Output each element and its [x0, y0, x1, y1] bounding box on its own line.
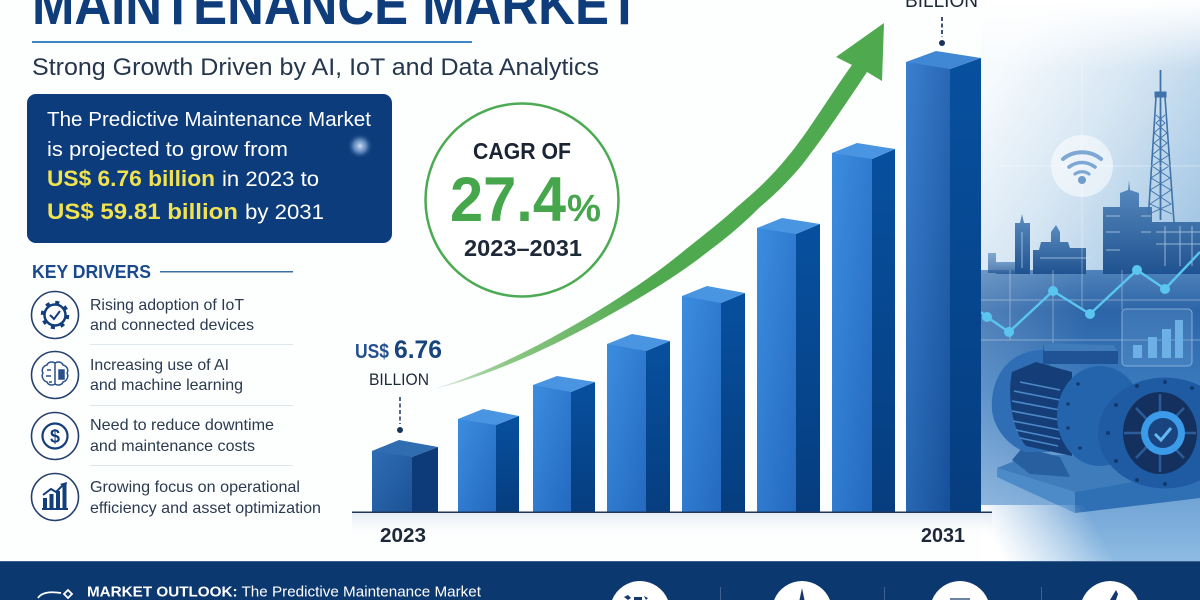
bar 2027: [682, 286, 745, 512]
icon: brain: [42, 362, 68, 385]
axis label 2031: 2031: [921, 525, 965, 547]
driver: AI: and machine learning: [90, 377, 243, 394]
icon: gear: [42, 302, 68, 328]
subtitle: Strong Growth Driven by AI, IoT and Data Analytics: [32, 54, 599, 81]
bar 2029: [832, 143, 895, 512]
driver: downtime: Need to reduce downtime: [90, 417, 274, 434]
bar chart: [352, 51, 992, 513]
footer icon 3: [932, 581, 988, 600]
driver: efficiency: Growing focus on operational: [90, 479, 300, 496]
growth arrow: [430, 23, 884, 390]
title rule: [32, 41, 472, 43]
bar 2028: [757, 218, 820, 512]
driver: efficiency: [32, 474, 321, 520]
tower lattice: [1148, 70, 1174, 222]
label: start value: BILLION: [369, 370, 429, 389]
driver: IoT: and connected devices: [90, 317, 254, 334]
axis label 2023: 2023: [380, 525, 426, 547]
CAGR callout: 2023–2031: [464, 235, 582, 261]
icon: dollar: [42, 424, 68, 448]
guide lines: [981, 60, 1200, 360]
electric motor: [992, 343, 1200, 513]
icon: dollar: $: [50, 426, 60, 446]
label: start value: 6.76: [394, 336, 442, 364]
label: start value: [355, 336, 442, 433]
bar 2024: [458, 409, 519, 512]
panel: market summary: is projected to grow from: [47, 138, 288, 161]
icon: growth chart: [42, 482, 68, 510]
label: end value: [905, 0, 978, 46]
panel: market summary: The Predictive Maintenance Market: [47, 108, 371, 131]
panel: market summary: by 2031: [245, 201, 324, 224]
driver: AI: Increasing use of AI: [90, 357, 229, 374]
label: start value: US$: [355, 341, 389, 363]
photo: industrial plant and motor: [981, 0, 1200, 561]
heading: key drivers: KEY DRIVERS: [32, 261, 151, 282]
icon: wifi: [1051, 135, 1113, 197]
panel: market summary: in 2023 to: [222, 168, 319, 191]
CAGR callout: 27.4: [450, 165, 566, 235]
footer band: [0, 561, 1200, 600]
driver: AI: [32, 352, 243, 398]
driver: IoT: Rising adoption of IoT: [90, 297, 244, 314]
CAGR callout: %: [567, 188, 601, 230]
driver: IoT: [32, 292, 254, 338]
bar 2025: [533, 376, 595, 512]
plant details: [1022, 216, 1200, 268]
icon: outlook: [38, 590, 72, 598]
footer icon 2: [774, 581, 830, 600]
driver: efficiency: efficiency and asset optimization: [90, 500, 321, 517]
panel: market summary: [27, 94, 392, 243]
panel: market summary: US$ 59.81 billion: [47, 199, 238, 224]
CAGR callout: [426, 104, 618, 296]
CAGR callout: CAGR OF: [473, 138, 571, 164]
bar 2031: [906, 51, 981, 512]
axis shadow: [352, 513, 992, 539]
bar 2023: [372, 440, 438, 512]
footer icon 4: [1082, 581, 1138, 600]
bar 2026: [607, 334, 670, 512]
mini bar chart card: [1122, 309, 1192, 366]
refinery skyline: [988, 180, 1200, 274]
panel: market summary: US$ 6.76 billion: [47, 166, 215, 191]
driver: downtime: and maintenance costs: [90, 438, 255, 455]
trend line: [981, 252, 1200, 337]
footer icon 1: [612, 581, 668, 600]
driver: downtime: [32, 412, 274, 460]
